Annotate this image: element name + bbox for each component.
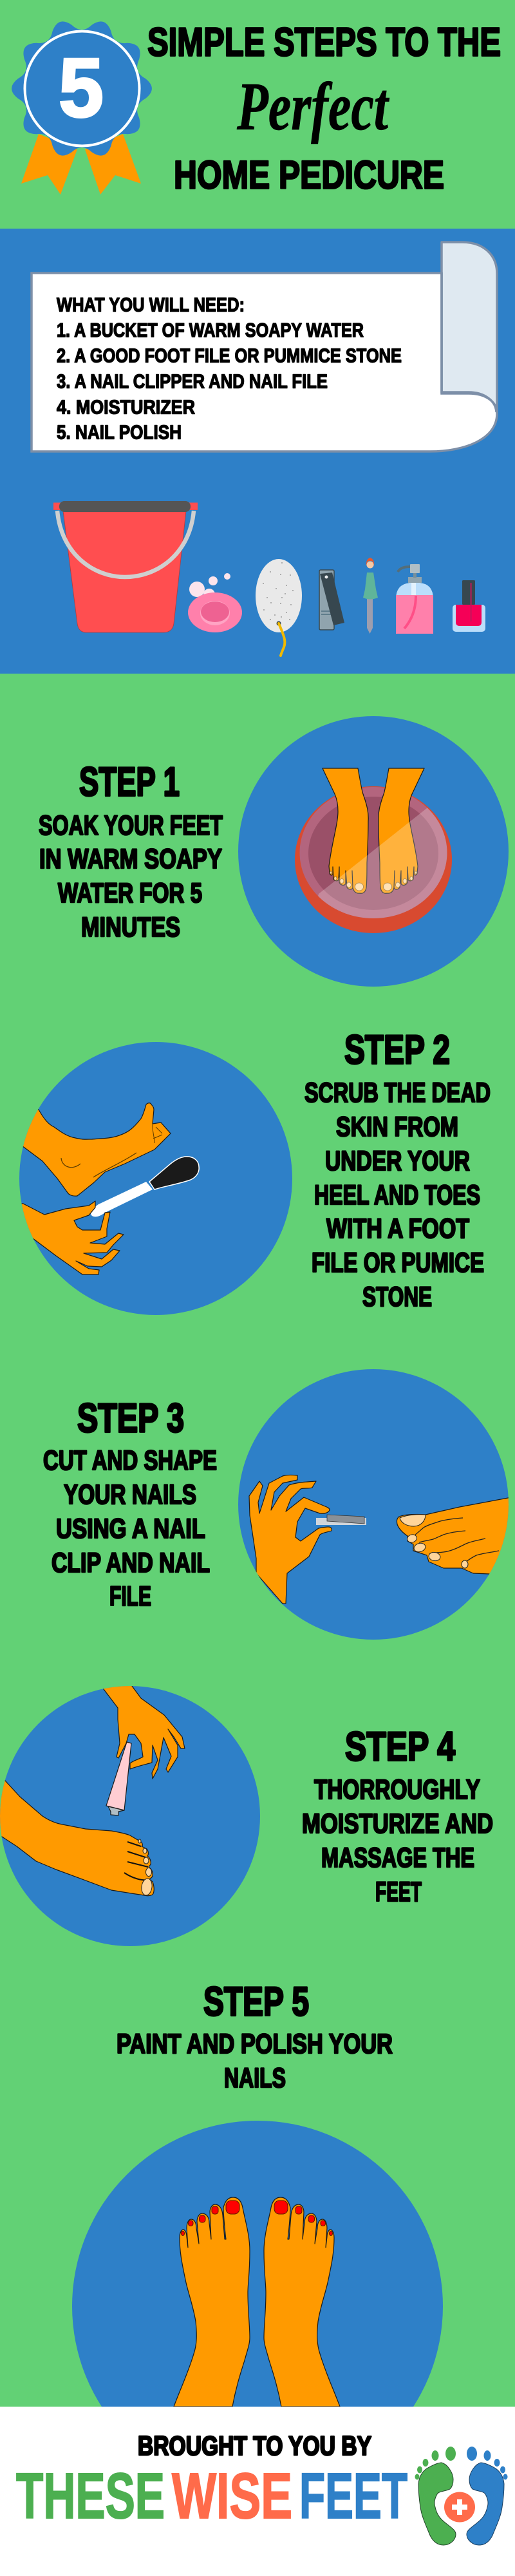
water highlight xyxy=(318,808,447,918)
icon: award badge with number 5 xyxy=(12,21,152,194)
icon: decorative nail file xyxy=(363,558,378,634)
panel: step 1 xyxy=(39,716,509,987)
step 2 text xyxy=(304,1028,491,1312)
hand xyxy=(103,1686,185,1779)
step 4 text xyxy=(302,1725,493,1908)
step 4 text: FEET xyxy=(375,1877,422,1908)
foot xyxy=(397,1496,515,1574)
left foot xyxy=(323,768,368,893)
icon: award badge with number 5: 5 xyxy=(59,41,104,135)
step 1 text: WATER FOR 5 xyxy=(58,878,202,909)
right foot xyxy=(264,2197,340,2407)
step 5 text: NAILS xyxy=(224,2063,286,2094)
step 1 text: MINUTES xyxy=(81,912,180,943)
supply list text: 1. A BUCKET OF WARM SOAPY WATER xyxy=(57,319,364,341)
step 3 text: FILE xyxy=(109,1581,151,1612)
step 3 text: CLIP AND NAIL xyxy=(52,1548,210,1578)
step 1 text xyxy=(39,760,223,943)
step 2 text: UNDER YOUR xyxy=(325,1146,470,1177)
hand xyxy=(10,1201,124,1274)
step 4 text: STEP 4 xyxy=(345,1725,455,1770)
step 5 text xyxy=(117,1980,393,2094)
foot xyxy=(13,1103,171,1196)
icon: nail polish xyxy=(453,580,485,632)
supply list text: 2. A GOOD FOOT FILE OR PUMMICE STONE xyxy=(57,344,402,366)
illustration: clipping nails xyxy=(238,1369,515,1640)
step 1 text: SOAK YOUR FEET xyxy=(39,810,223,841)
step 2 text: WITH A FOOT xyxy=(326,1213,469,1244)
supply list text xyxy=(57,293,402,443)
supply list text: 4. MOISTURIZER xyxy=(57,395,195,418)
panel: step 3 xyxy=(43,1369,515,1640)
step 5 text: PAINT AND POLISH YOUR xyxy=(117,2029,393,2060)
foot xyxy=(0,1768,154,1896)
logo wordmark: WISE xyxy=(172,2460,292,2532)
scroll paper xyxy=(32,242,497,451)
icon: pumice stone xyxy=(256,559,302,656)
nail clipper xyxy=(316,1518,366,1525)
white footer background xyxy=(0,2407,515,2576)
step 3 text: STEP 3 xyxy=(77,1396,184,1441)
step 3 text: YOUR NAILS xyxy=(64,1479,196,1510)
illustration: painted toenails xyxy=(72,2121,443,2407)
toenails xyxy=(138,1839,153,1896)
moisturizer tube xyxy=(106,1742,131,1810)
hand xyxy=(249,1475,332,1604)
illustration: moisturizing xyxy=(0,1674,260,1946)
step 3 text: CUT AND SHAPE xyxy=(43,1445,217,1476)
step 5 text: STEP 5 xyxy=(203,1980,309,2025)
title: HOME PEDICURE xyxy=(174,153,444,197)
title: Perfect xyxy=(236,69,390,144)
step 2 text: SKIN FROM xyxy=(336,1112,458,1142)
left foot xyxy=(174,2197,250,2407)
logo wordmark: THESE xyxy=(16,2460,165,2532)
icon: bucket xyxy=(53,501,198,632)
logo wordmark xyxy=(16,2460,407,2532)
logo wordmark: FEET xyxy=(299,2460,407,2532)
supply list text: WHAT YOU WILL NEED: xyxy=(57,293,245,316)
credit line: BROUGHT TO YOU BY xyxy=(138,2430,371,2461)
header xyxy=(12,21,501,197)
panel: step 4 xyxy=(0,1674,493,1946)
foot file xyxy=(149,1157,199,1189)
step 3 text xyxy=(43,1396,217,1612)
step 3 text: USING A NAIL xyxy=(56,1513,205,1544)
step 2 text: STEP 2 xyxy=(344,1028,450,1073)
title xyxy=(147,21,501,197)
panel: step 5 xyxy=(72,1986,443,2407)
panel: step 2 xyxy=(10,1028,491,1315)
illustration: foot file xyxy=(10,1042,292,1315)
icon: moisturizer pump bottle xyxy=(396,564,433,634)
step 1 text: IN WARM SOAPY xyxy=(39,844,222,875)
icon: soap with bubbles xyxy=(188,573,242,632)
panel: footer xyxy=(0,2407,515,2576)
illustration: feet in tub xyxy=(238,716,509,987)
icon: nail clipper xyxy=(319,570,344,630)
step 2 text: STONE xyxy=(362,1282,432,1312)
blue band background xyxy=(0,229,515,674)
supply list text: 5. NAIL POLISH xyxy=(57,421,182,443)
step 1 text: STEP 1 xyxy=(79,760,180,805)
right foot xyxy=(379,768,424,893)
panel: what you will need xyxy=(0,229,515,674)
toenails xyxy=(400,1515,468,1568)
supply list text: 3. A NAIL CLIPPER AND NAIL FILE xyxy=(57,370,328,392)
icon: logo feet with medical cross xyxy=(415,2447,507,2545)
